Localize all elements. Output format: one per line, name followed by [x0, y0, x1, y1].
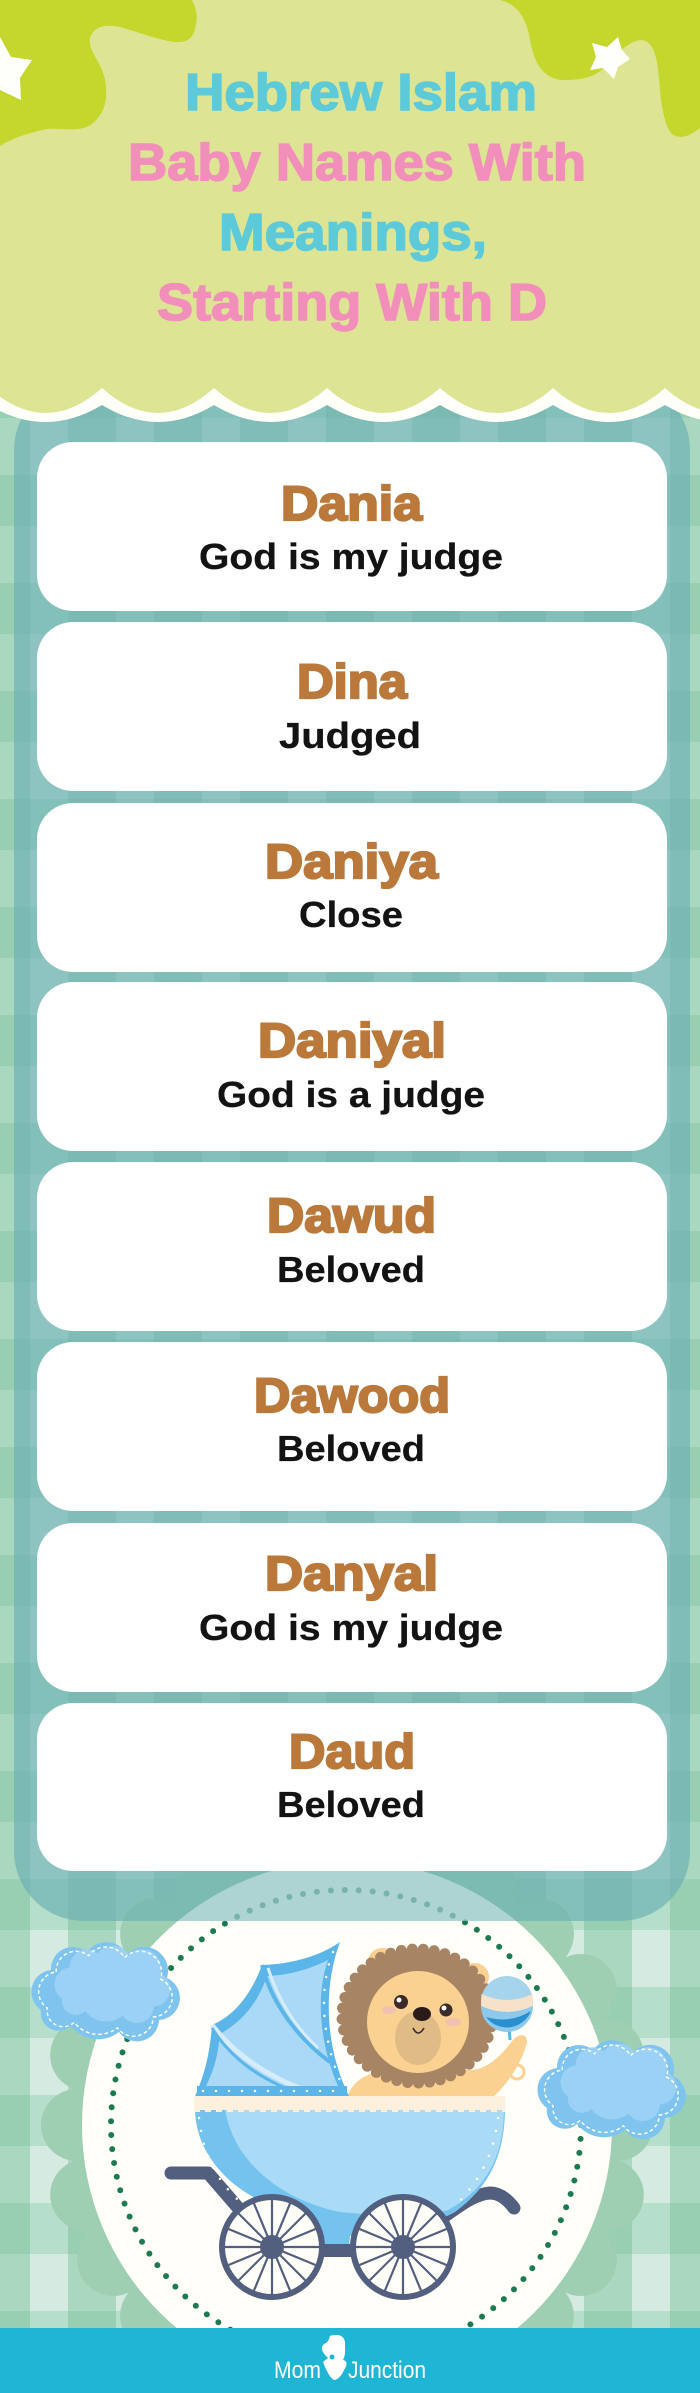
card: Dawood: Beloved [277, 1428, 425, 1469]
title: Baby Names With [128, 134, 586, 192]
card: Daud: Beloved [277, 1784, 425, 1825]
card: Daniyal [37, 982, 667, 1151]
logo: MomJunction: Mom [274, 2357, 321, 2384]
card: Dina: Dina [297, 656, 407, 709]
card: Danyal: Danyal [265, 1548, 438, 1601]
card: Dawud: Beloved [277, 1249, 425, 1290]
header background [0, 0, 700, 413]
white circle seen through panel [178, 1871, 516, 1921]
icon: wheel right [353, 2197, 453, 2297]
card: Daniya: Daniya [265, 836, 438, 889]
icon: stroller hood [195, 1942, 349, 2096]
logo: MomJunction: Junction [348, 2357, 426, 2384]
card: Dania [37, 442, 667, 611]
header corner blob right [500, 0, 700, 137]
white circle [82, 1860, 612, 2390]
card: Daniyal: God is a judge [217, 1074, 485, 1115]
panel: translucent teal list background [14, 380, 690, 1921]
card: Dawud: Dawud [267, 1190, 436, 1243]
icon: wheel left [222, 2197, 322, 2297]
card: Dawood: Dawood [254, 1370, 450, 1423]
title [128, 64, 586, 332]
card: Dina [37, 622, 667, 791]
card: Dania: Dania [281, 478, 422, 531]
card: Daud [37, 1703, 667, 1871]
icon: lion with rattle [342, 1948, 533, 2100]
card: Dania: God is my judge [199, 536, 503, 577]
card: Daniyal: Daniyal [258, 1015, 446, 1068]
icon: stroller axle [320, 2244, 356, 2257]
card: Dawood [37, 1342, 667, 1511]
card: Dawud [37, 1162, 667, 1331]
title: Starting With D [157, 274, 547, 332]
card: Danyal [37, 1523, 667, 1692]
card: Daniya: Close [299, 894, 403, 935]
dotted ring [111, 1890, 581, 2360]
icon: star left [0, 37, 32, 100]
header corner blob left [0, 0, 197, 146]
title: Meanings, [219, 204, 487, 262]
icon: cloud right [537, 2040, 686, 2139]
icon: star right [590, 37, 630, 79]
card: Daud: Daud [289, 1726, 415, 1779]
icon: cloud left [31, 1942, 180, 2041]
icon: stroller handles [171, 2173, 514, 2218]
card: Daniya [37, 803, 667, 972]
title: Hebrew Islam [185, 64, 537, 122]
card: Danyal: God is my judge [199, 1607, 503, 1648]
icon: stroller basket [194, 2096, 505, 2247]
scalloped badge behind circle [41, 1842, 653, 2393]
footer bar [0, 2328, 700, 2393]
logo: MomJunction [274, 2335, 426, 2384]
card: Dina: Judged [279, 715, 421, 756]
header white scallop trim [0, 0, 700, 422]
